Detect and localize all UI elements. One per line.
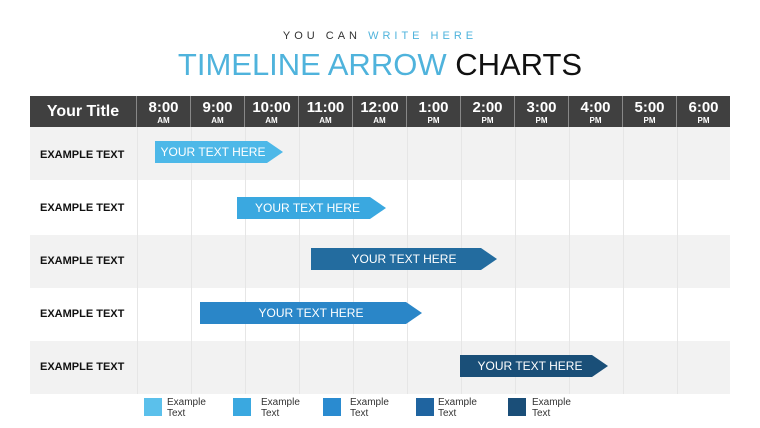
header row: PM <box>428 116 440 125</box>
arrow 3: YOUR TEXT HERE <box>352 252 456 266</box>
header row: 5:00 <box>634 99 665 116</box>
legend: Text <box>532 408 550 419</box>
text: EXAMPLE TEXT <box>40 361 124 373</box>
legend: Text <box>261 408 279 419</box>
header row: 11:00 <box>307 99 344 116</box>
header row: AM <box>319 116 332 125</box>
header row: 4:00 <box>580 99 611 116</box>
header row: 10:00 <box>252 99 291 116</box>
legend: Example <box>532 397 571 408</box>
header row: 8:00 <box>148 99 179 116</box>
header row: 1:00 <box>418 99 449 116</box>
arrow 4: YOUR TEXT HERE <box>259 306 363 320</box>
legend: Example <box>167 397 206 408</box>
header row: PM <box>482 116 494 125</box>
legend: Example <box>261 397 300 408</box>
header row: AM <box>265 116 278 125</box>
header row: 2:00 <box>472 99 503 116</box>
header row <box>30 96 730 127</box>
header row: AM <box>373 116 386 125</box>
text: EXAMPLE TEXT <box>40 202 124 214</box>
legend: Text <box>350 408 368 419</box>
legend: Text <box>167 408 185 419</box>
header row: 6:00 <box>688 99 719 116</box>
arrow 2 <box>237 197 386 219</box>
header row: 12:00 <box>360 99 399 116</box>
header row: PM <box>644 116 656 125</box>
header row: PM <box>698 116 710 125</box>
arrow 5 <box>460 355 608 377</box>
header row: PM <box>590 116 602 125</box>
row labels: EXAMPLE TEXT <box>40 149 124 161</box>
header row: PM <box>536 116 548 125</box>
subtitle: YOU CAN WRITE HERE <box>283 30 477 42</box>
arrow 1 <box>155 141 283 163</box>
arrow 3 <box>311 248 497 270</box>
header row: 9:00 <box>202 99 233 116</box>
arrow 2: YOUR TEXT HERE <box>255 201 360 215</box>
header row: AM <box>211 116 224 125</box>
text: EXAMPLE TEXT <box>40 308 124 320</box>
legend: Example <box>438 397 477 408</box>
title: TIMELINE ARROW CHARTS <box>178 47 582 82</box>
header row: 3:00 <box>526 99 557 116</box>
header row: AM <box>157 116 170 125</box>
arrow 4 <box>200 302 422 324</box>
text: EXAMPLE TEXT <box>40 255 124 267</box>
header row: Your Title <box>47 103 119 120</box>
table background rows <box>30 127 730 180</box>
arrow 5: YOUR TEXT HERE <box>478 359 582 373</box>
legend <box>144 397 571 419</box>
legend: Example <box>350 397 389 408</box>
legend: Text <box>438 408 456 419</box>
arrow 1: YOUR TEXT HERE <box>161 145 265 159</box>
